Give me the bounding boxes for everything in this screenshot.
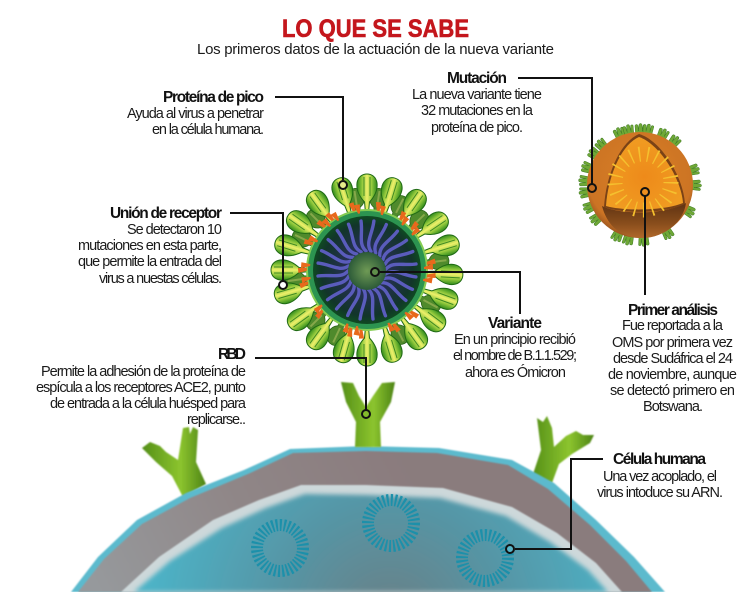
text: unión de receptor: Unión de receptor <box>110 205 222 222</box>
virus envelope <box>307 210 427 330</box>
text: primer análisis: Fue reportada a la <box>622 318 724 334</box>
illustration: main virus <box>271 174 463 366</box>
receptor: centre <box>341 382 395 447</box>
text: célula humana <box>597 451 723 501</box>
text: primer análisis: se detectó primero en <box>610 383 735 399</box>
illustration: cutaway virus <box>578 123 702 247</box>
leader: primer análisis <box>644 196 646 295</box>
cut section <box>604 134 685 212</box>
text: mutación: Mutación <box>447 70 507 87</box>
leader: proteína de pico <box>275 97 343 180</box>
cell interior <box>134 494 608 592</box>
marker: proteína de pico <box>339 181 347 189</box>
marker: primer análisis <box>641 188 649 196</box>
text: variante: el nombre de B.1.1.529; <box>453 348 577 364</box>
title: LO QUE SE SABE <box>282 15 469 43</box>
orange proteins <box>297 201 437 340</box>
leader: RBD <box>255 358 366 410</box>
leader: unión de receptor <box>230 213 283 281</box>
small spikes <box>578 123 702 247</box>
short spikes <box>284 187 450 348</box>
marker: RBD <box>362 410 370 418</box>
text: célula humana: Célula humana <box>613 451 706 468</box>
text: RBD: Permite la adhesión de la proteína de <box>41 364 246 380</box>
marker: unión de receptor <box>279 281 287 289</box>
marker: célula humana <box>506 545 514 553</box>
cell grey band <box>78 451 652 592</box>
text: mutación: 32 mutaciones en la <box>421 103 534 119</box>
text: proteína de pico: Proteína de pico <box>163 89 264 106</box>
text: primer análisis: desde Sudáfrica el 24 <box>613 351 733 367</box>
text: variante: En un principio recibió <box>454 332 576 348</box>
leader: célula humana <box>515 459 603 549</box>
orange shell <box>587 132 693 238</box>
text: variante <box>453 315 577 381</box>
text: primer análisis: de noviembre, aunque <box>608 367 737 383</box>
subtitle: Los primeros datos de la actuación de la nueva variante <box>197 41 554 58</box>
text: RBD: RBD <box>218 346 246 363</box>
vesicle: centre <box>368 500 414 546</box>
text: proteína de pico: en la célula humana. <box>152 122 264 138</box>
text: mutación <box>412 70 542 136</box>
vesicle: left <box>257 525 303 571</box>
text: RBD: de entrada a la célula huésped para <box>50 396 247 412</box>
text: unión de receptor: que permite la entrada del <box>78 254 222 270</box>
text: RBD: espícula a los receptores ACE2, punto <box>36 380 246 396</box>
leader lines and markers <box>230 78 649 553</box>
virus core <box>348 252 386 290</box>
marker: mutación <box>588 184 596 192</box>
text: variante: ahora es Ómicron <box>465 364 566 381</box>
receptor: left <box>142 427 206 497</box>
vesicle: right <box>462 535 508 581</box>
text: célula humana: virus intoduce su ARN. <box>597 485 723 501</box>
text: unión de receptor <box>78 205 222 287</box>
receptor: right <box>532 416 594 483</box>
text: primer análisis: Botswana. <box>643 399 703 415</box>
cut section interior <box>606 137 683 209</box>
cell outer membrane <box>71 446 665 592</box>
text: primer análisis <box>608 302 737 415</box>
text: mutación: proteína de pico. <box>431 120 523 136</box>
cell bottom clip <box>60 592 680 608</box>
leader: variante <box>380 272 520 314</box>
text: unión de receptor: mutaciones en esta parte, <box>78 238 222 254</box>
text: variante: Variante <box>488 315 542 332</box>
text: célula humana: Una vez acoplado, el <box>603 469 717 485</box>
long spikes <box>271 174 463 366</box>
text: proteína de pico: Ayuda al virus a penetrar <box>127 106 264 122</box>
text: proteína de pico <box>127 89 264 138</box>
text: unión de receptor: virus a nuestas células. <box>99 271 222 287</box>
cell white highlight <box>121 485 622 592</box>
text: mutación: La nueva variante tiene <box>412 87 542 103</box>
text: primer análisis: Primer análisis <box>628 302 718 319</box>
text: RBD: replicarse.. <box>187 412 246 428</box>
text: primer análisis: OMS por primera vez <box>612 335 733 351</box>
shell underside <box>602 203 686 238</box>
yellow rays <box>615 154 671 210</box>
virus interior <box>313 216 421 324</box>
text: unión de receptor: Se detectaron 10 <box>127 222 222 238</box>
marker: variante <box>371 268 379 276</box>
RNA ribbons <box>318 221 416 319</box>
illustration: human cell <box>60 382 680 608</box>
leader: mutación <box>518 78 592 184</box>
text: RBD <box>36 346 247 428</box>
